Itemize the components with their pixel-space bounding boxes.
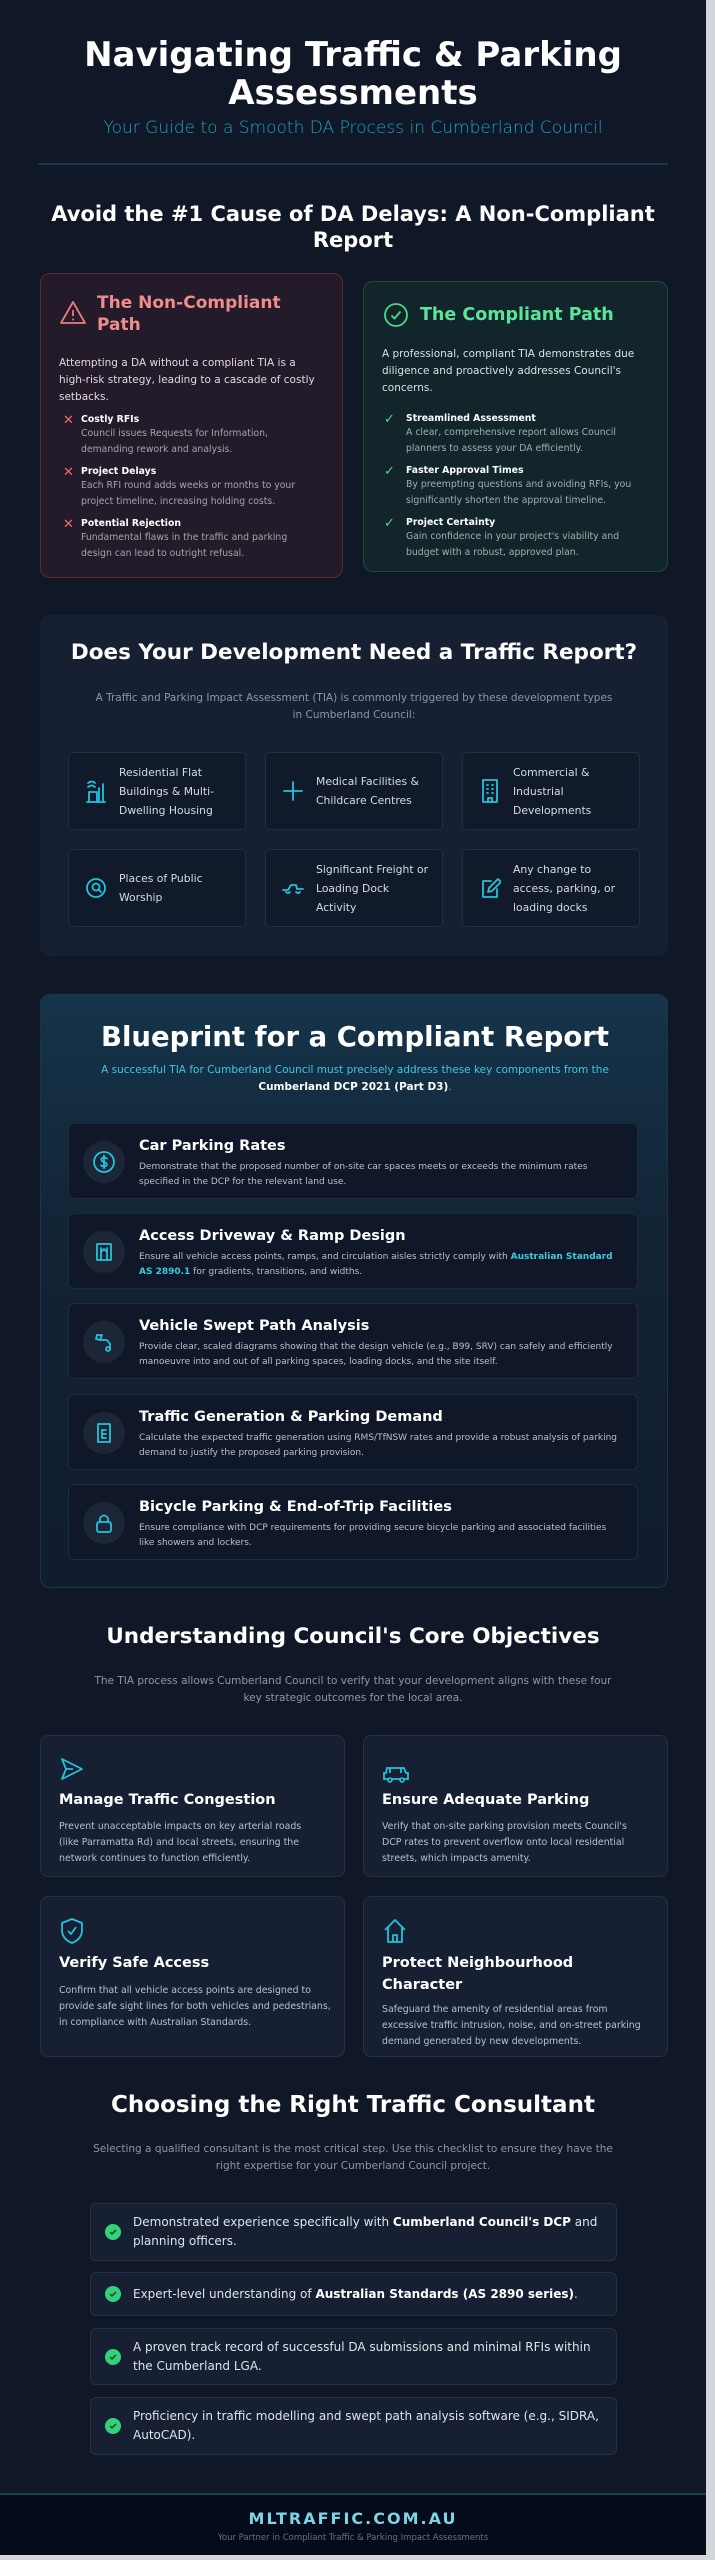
heading: avoid delays [51, 202, 655, 252]
tile: residential [68, 752, 246, 830]
icon: check circle [384, 303, 408, 327]
checklist item 4: Proficiency in traffic modelling and swept path analysis software (e.g., SIDRA, AutoCAD). [133, 2409, 599, 2442]
icon: house [384, 1919, 406, 1943]
tile: medical [265, 752, 443, 830]
card: neighbourhood: Protect Neighbourhood Character [382, 1955, 573, 1993]
text: A professional, compliant TIA demonstrates due diligence and proactively addresses Council's concerns. [382, 348, 634, 394]
tile: worship [68, 849, 246, 927]
list: benefits: ✓ [384, 464, 395, 479]
card: safe access: Verify Safe Access [59, 1955, 209, 1971]
checklist item 4 [90, 2397, 617, 2455]
tile: medical: Medical Facilities & Childcare Centres [316, 775, 419, 807]
list: costs: Potential Rejection [81, 518, 181, 529]
panel: blueprint [40, 994, 668, 1588]
heading [97, 293, 281, 335]
item: traffic generation: Traffic Generation & Parking Demand [139, 1409, 443, 1425]
tile: worship: Places of Public Worship [119, 872, 203, 904]
subtitle: consultant: Selecting a qualified consultant is the most critical step. Use this checklist to ensure they have the right expertise for your Cumberland Council project. [93, 2143, 613, 2172]
list: costs: Council issues Requests for Information, demanding rework and analysis. [81, 428, 268, 455]
item: traffic generation [68, 1394, 638, 1470]
list: benefits: By preempting questions and avoiding RFIs, you significantly shorten the approval timeline. [406, 479, 631, 506]
heading: Path [97, 315, 141, 335]
item: car parking rates: Car Parking Rates [139, 1138, 286, 1154]
title: Assessments [228, 73, 478, 113]
tile: commercial [462, 752, 640, 830]
heading: The Compliant Path [420, 305, 614, 325]
list: costs: Project Delays [81, 466, 156, 477]
subtitle: A successful TIA for Cumberland Council must precisely address these key components from the Cumberland DCP 2021 (Part D3). [101, 1064, 609, 1093]
list: costs: Fundamental flaws in the traffic and parking design can lead to outright refusal. [81, 532, 287, 559]
heading: core objectives: Understanding Council's Core Objectives [106, 1624, 600, 1649]
heading: consultant: Choosing the Right Traffic Consultant [111, 2092, 595, 2118]
card: safe access: Confirm that all vehicle access points are designed to provide safe sight lines for both vehicles and pedestrians, in compliance with Australian Standards. [59, 1985, 331, 2028]
icon: warning [60, 301, 86, 324]
list: costs: ✕ [63, 413, 74, 428]
tile: freight [265, 849, 443, 927]
heading: Does Your Development Need a Traffic Report? [71, 640, 637, 665]
card: congestion: Manage Traffic Congestion [59, 1792, 276, 1808]
item: swept path: Provide clear, scaled diagrams showing that the design vehicle (e.g., B99, SRV) can safely and efficiently manoeuvre into and out of all parking spaces, loading docks, and the site itself. [139, 1342, 613, 1367]
checklist item 2 [90, 2272, 617, 2316]
list: benefits: Project Certainty [406, 517, 495, 528]
list: benefits: Streamlined Assessment [406, 413, 536, 424]
footer: MLTRAFFIC.COM.AU [249, 2509, 457, 2528]
card: neighbourhood [363, 1896, 668, 2057]
heading: Blueprint for a Compliant Report [101, 1021, 609, 1053]
tile: commercial: Commercial & Industrial Developments [513, 766, 591, 816]
list: benefits: Gain confidence in your project's viability and budget with a robust, approved plan. [406, 531, 619, 558]
tile: freight: Significant Freight or Loading Dock Activity [316, 862, 428, 914]
title [84, 35, 622, 113]
card: parking: Verify that on-site parking provision meets Council's DCP rates to prevent overflow onto local residential streets, which impacts amenity. [382, 1821, 627, 1864]
list: benefits: ✓ [384, 412, 395, 427]
card: congestion: Prevent unacceptable impacts on key arterial roads (like Parramatta Rd) and local streets, ensuring the network continues to function efficiently. [59, 1821, 301, 1864]
list: costs: Each RFI round adds weeks or months to your project timeline, increasing holding costs. [81, 480, 295, 507]
footer: Your Partner in Compliant Traffic & Parking Impact Assessments [218, 2533, 488, 2543]
checklist item 3 [90, 2328, 617, 2385]
icon: send [61, 1758, 83, 1780]
card: parking [363, 1735, 668, 1877]
panel: non-compliant path [40, 273, 343, 578]
checklist item 2: Expert-level understanding of Australian Standards (AS 2890 series). [133, 2286, 578, 2300]
item: bicycle parking [68, 1484, 638, 1560]
text: Attempting a DA without a compliant TIA is a high-risk strategy, leading to a cascade of costly setbacks. [59, 357, 315, 403]
list: benefits [384, 412, 631, 558]
item: bicycle parking: Bicycle Parking & End-of-Trip Facilities [139, 1499, 452, 1515]
item: swept path: Vehicle Swept Path Analysis [139, 1318, 369, 1334]
card: safe access [40, 1896, 345, 2057]
checklist item 1 [90, 2203, 617, 2261]
heading: avoid delays: Avoid the #1 Cause of DA Delays: A Non-Compliant [51, 202, 655, 226]
card: parking: Ensure Adequate Parking [382, 1792, 589, 1808]
checklist item 3: A proven track record of successful DA submissions and minimal RFIs within the Cumberland LGA. [133, 2340, 591, 2372]
tile: residential: Residential Flat Buildings & Multi-Dwelling Housing [119, 766, 214, 816]
panel: compliant path [363, 281, 668, 572]
list: costs: Costly RFIs [81, 414, 139, 425]
item: traffic generation: Calculate the expected traffic generation using RMS/TfNSW rates and provide a robust analysis of parking demand to justify the proposed parking provision. [139, 1433, 617, 1458]
item: access driveway: Access Driveway & Ramp Design [139, 1228, 406, 1244]
list: benefits: A clear, comprehensive report allows Council planners to assess your DA efficiently. [406, 427, 616, 454]
icon: car [383, 1767, 409, 1783]
checklist item 1: Demonstrated experience specifically with Cumberland Council's DCP and planning officers. [133, 2215, 597, 2248]
tile: any change [462, 849, 640, 927]
heading: The Non-Compliant [97, 293, 281, 313]
item: swept path [68, 1303, 638, 1379]
panel: does your development need a report [40, 615, 668, 956]
card: neighbourhood: Safeguard the amenity of residential areas from excessive traffic intrusion, noise, and on-street parking demand generated by new developments. [382, 2004, 641, 2047]
title: Navigating Traffic & Parking [84, 35, 622, 75]
tile: any change: Any change to access, parking, or loading docks [513, 862, 615, 914]
list: costs: ✕ [63, 517, 74, 532]
icon: shield [61, 1918, 83, 1944]
item: car parking rates [68, 1123, 638, 1199]
card: congestion [40, 1735, 345, 1877]
list: benefits: Faster Approval Times [406, 465, 523, 476]
footer [0, 2493, 706, 2555]
subtitle: Your Guide to a Smooth DA Process in Cumberland Council [103, 118, 603, 138]
item: access driveway: Ensure all vehicle access points, ramps, and circulation aisles strictly comply with Australian Standard AS 2890.1 for gradients, transitions, and widths. [139, 1252, 613, 1277]
item: car parking rates: Demonstrate that the proposed number of on-site car spaces meets or exceeds the minimum rates specified in the DCP for the relevant land use. [139, 1162, 587, 1187]
list: costs: ✕ [63, 465, 74, 480]
list: costs [63, 413, 296, 559]
subtitle: core objectives: The TIA process allows Cumberland Council to verify that your development aligns with these four key strategic outcomes for the local area. [94, 1675, 612, 1704]
subtitle: A Traffic and Parking Impact Assessment (TIA) is commonly triggered by these development types in Cumberland Council: [96, 692, 612, 721]
list: benefits: ✓ [384, 516, 395, 531]
heading: avoid delays: Report [313, 228, 393, 252]
item: access driveway [68, 1213, 638, 1289]
item: bicycle parking: Ensure compliance with DCP requirements for providing secure bicycle parking and associated facilities like showers and lockers. [139, 1523, 606, 1548]
